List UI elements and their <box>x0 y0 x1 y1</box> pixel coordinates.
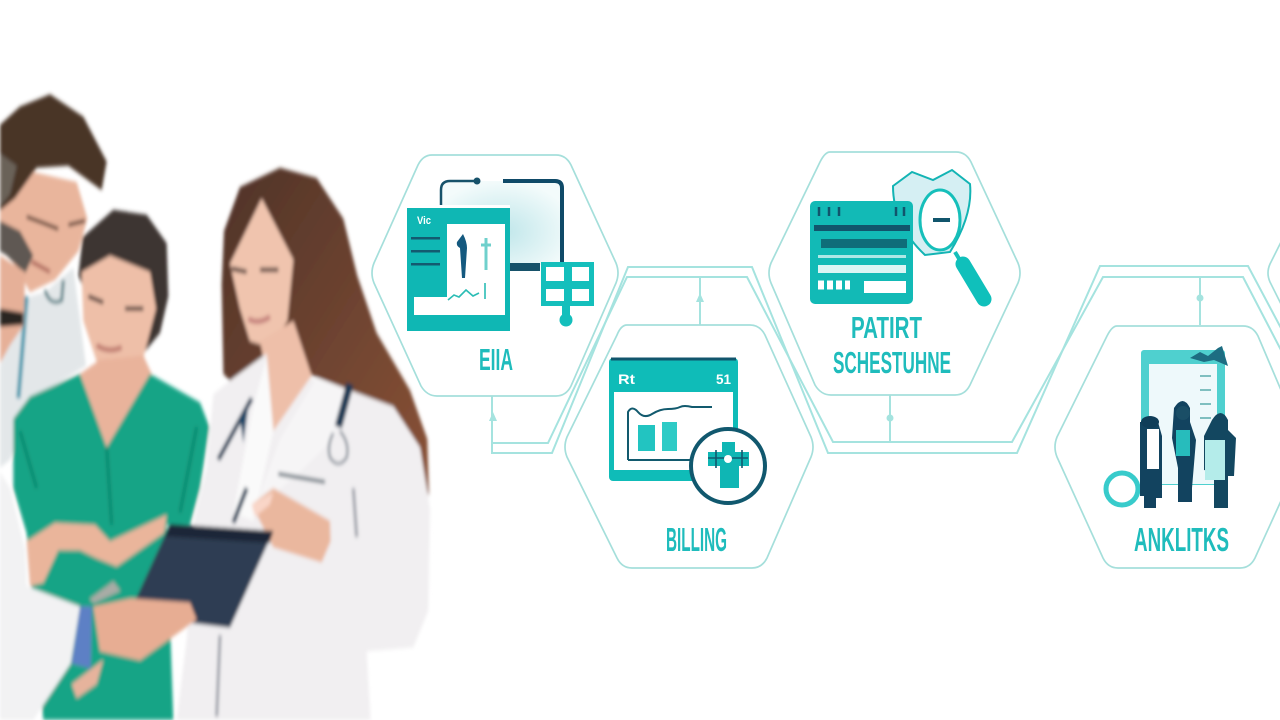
figure: female doctor in white coat <box>177 168 430 720</box>
photo: medical team looking at tablet <box>0 94 430 720</box>
figure: male doctor in front <box>0 221 197 720</box>
icon: calendar and magnifier <box>810 170 984 304</box>
icon: records screens <box>407 178 594 331</box>
icon: tablet <box>128 524 273 628</box>
figure: male doctor in the back <box>0 94 107 468</box>
icon: records screens: Vic <box>417 215 431 227</box>
icon: billing dashboard: Rt <box>618 371 635 387</box>
connector lines <box>489 266 1280 453</box>
label: patient scheduling: SCHESTUHNE <box>833 345 951 380</box>
icon: billing dashboard: 51 <box>716 371 731 387</box>
icon: team with report board <box>1106 346 1236 508</box>
label: patient scheduling <box>833 310 951 380</box>
panel: billing hexagon: BILLING <box>666 521 727 558</box>
figure: nurse in green scrubs <box>13 210 209 720</box>
label: EHR: EIIA <box>479 342 513 377</box>
panel: partial hexagon at right edge <box>1268 236 1280 310</box>
panel: patient scheduling hexagon <box>769 152 1020 395</box>
panel: billing hexagon <box>565 325 813 568</box>
label: patient scheduling: PATIRT <box>851 310 922 345</box>
icon: billing dashboard <box>609 358 765 503</box>
panel: analytics hexagon <box>1055 326 1280 568</box>
panel: EHR hexagon <box>372 155 618 396</box>
